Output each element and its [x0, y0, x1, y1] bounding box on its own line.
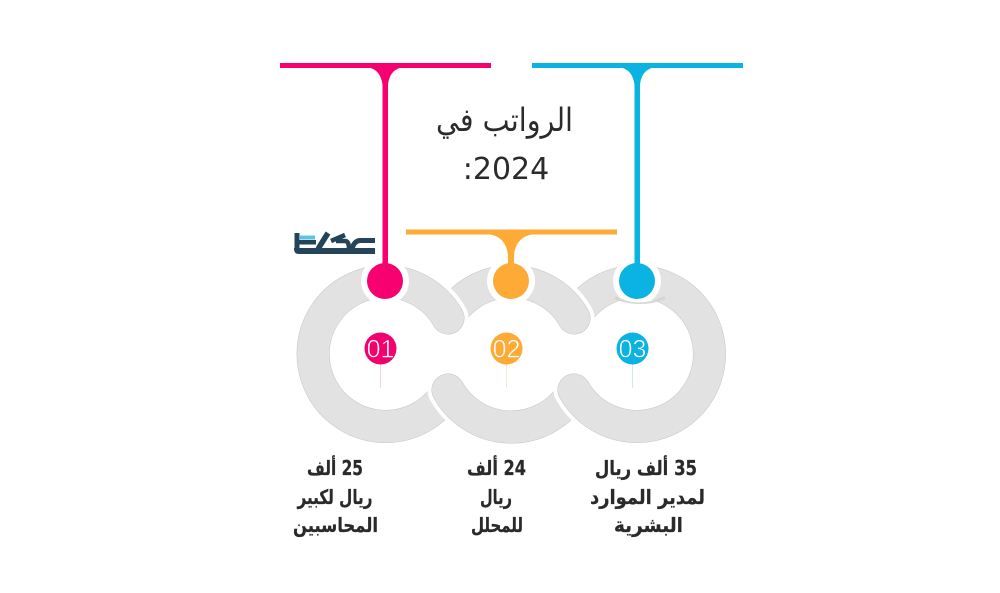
title: 2024: [463, 152, 549, 187]
badge: 02 [490, 332, 522, 388]
connector: blue T bar and marker [532, 63, 743, 299]
logo: Okaz [294, 233, 375, 254]
text block: accountants salary: ريال لكبير [297, 485, 372, 509]
text block: accountants salary: المحاسبين [293, 513, 378, 537]
text block: HR manager salary: البشرية [614, 513, 683, 537]
badge: 01: 01 [367, 336, 394, 364]
title: الرواتب في [436, 101, 573, 139]
title [436, 101, 573, 187]
text block: analyst salary [467, 454, 526, 537]
text block: HR manager salary: 35 ألف ريال [595, 454, 697, 480]
badge: 03: 03 [619, 336, 646, 364]
badge: 02: 02 [493, 336, 520, 364]
connector: pink T bar and marker [280, 63, 491, 299]
connector: orange T bar and marker [406, 230, 617, 299]
text block: analyst salary: ريال [480, 485, 512, 509]
chart: interlocking grey rings [313, 257, 709, 427]
badge: 03 [616, 332, 648, 388]
text block: HR manager salary: لمدير الموارد [590, 485, 705, 509]
badge: 01 [364, 332, 396, 388]
text block: accountants salary [293, 454, 378, 537]
text block: accountants salary: 25 ألف [307, 454, 363, 480]
text block: HR manager salary [590, 454, 705, 537]
text block: analyst salary: للمحلل [471, 513, 523, 537]
text block: analyst salary: 24 ألف [467, 454, 526, 480]
